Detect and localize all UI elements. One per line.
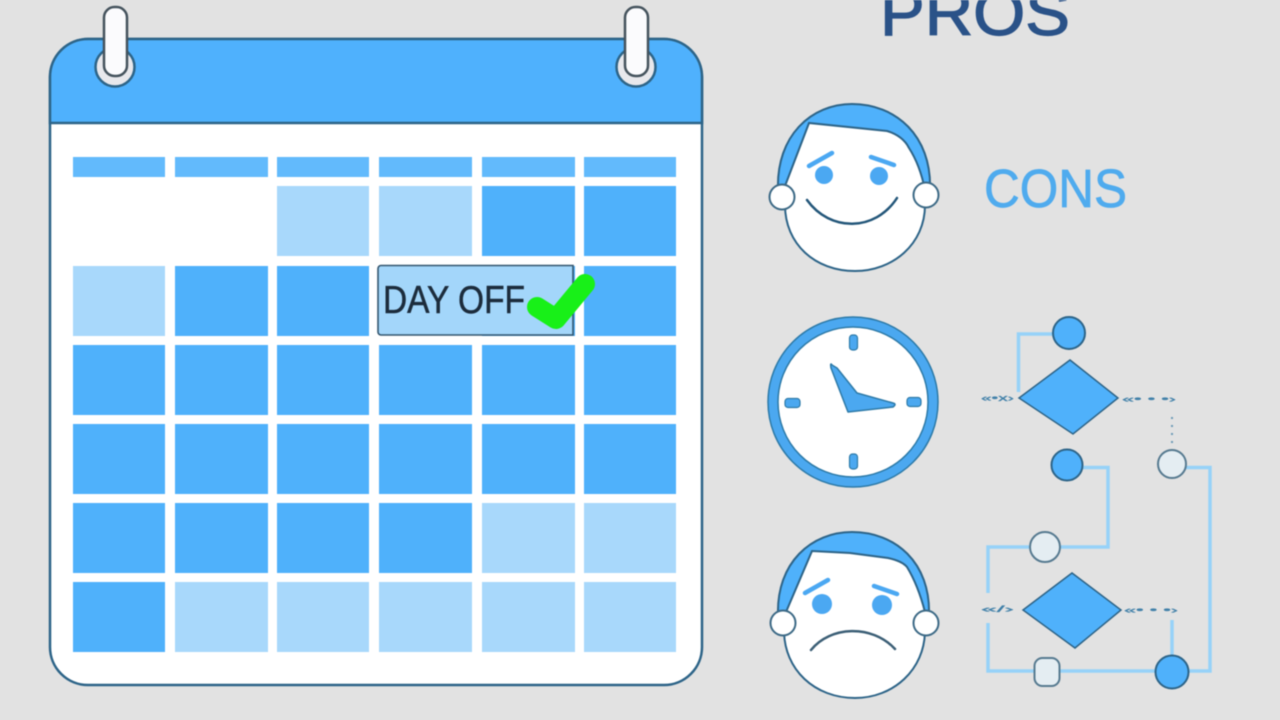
top decision diamond	[1019, 360, 1118, 434]
dotted link	[1171, 417, 1173, 446]
branch labels: «• • •›	[1124, 605, 1178, 615]
icon: clock	[768, 317, 938, 487]
flowchart	[981, 317, 1210, 688]
bottom circle node	[1156, 656, 1188, 688]
right binder ring	[616, 7, 656, 86]
day cells	[73, 186, 676, 652]
connector lines	[988, 334, 1210, 671]
calendar body	[50, 39, 702, 685]
weekday bars	[73, 157, 676, 177]
branch labels	[981, 393, 1178, 615]
icon: smiling face	[770, 104, 938, 271]
calendar header	[50, 39, 702, 123]
branch labels: «• • •›	[1122, 394, 1176, 404]
icon: green check mark	[537, 284, 585, 319]
empty circle node	[1030, 532, 1060, 562]
branch labels: «•x›	[981, 393, 1014, 403]
lower decision diamond	[1023, 573, 1121, 648]
second circle node	[1052, 450, 1082, 480]
icon: sad face	[770, 532, 938, 698]
heading: cons: CONS	[984, 159, 1127, 219]
day off label	[378, 266, 573, 335]
pale circle node	[1158, 450, 1186, 478]
day off label: DAY OFF	[383, 279, 525, 322]
left binder ring	[96, 7, 134, 86]
branch labels: «/›	[981, 604, 1014, 614]
calendar	[50, 7, 702, 685]
top circle node	[1053, 317, 1085, 349]
rounded square node	[1034, 658, 1060, 686]
